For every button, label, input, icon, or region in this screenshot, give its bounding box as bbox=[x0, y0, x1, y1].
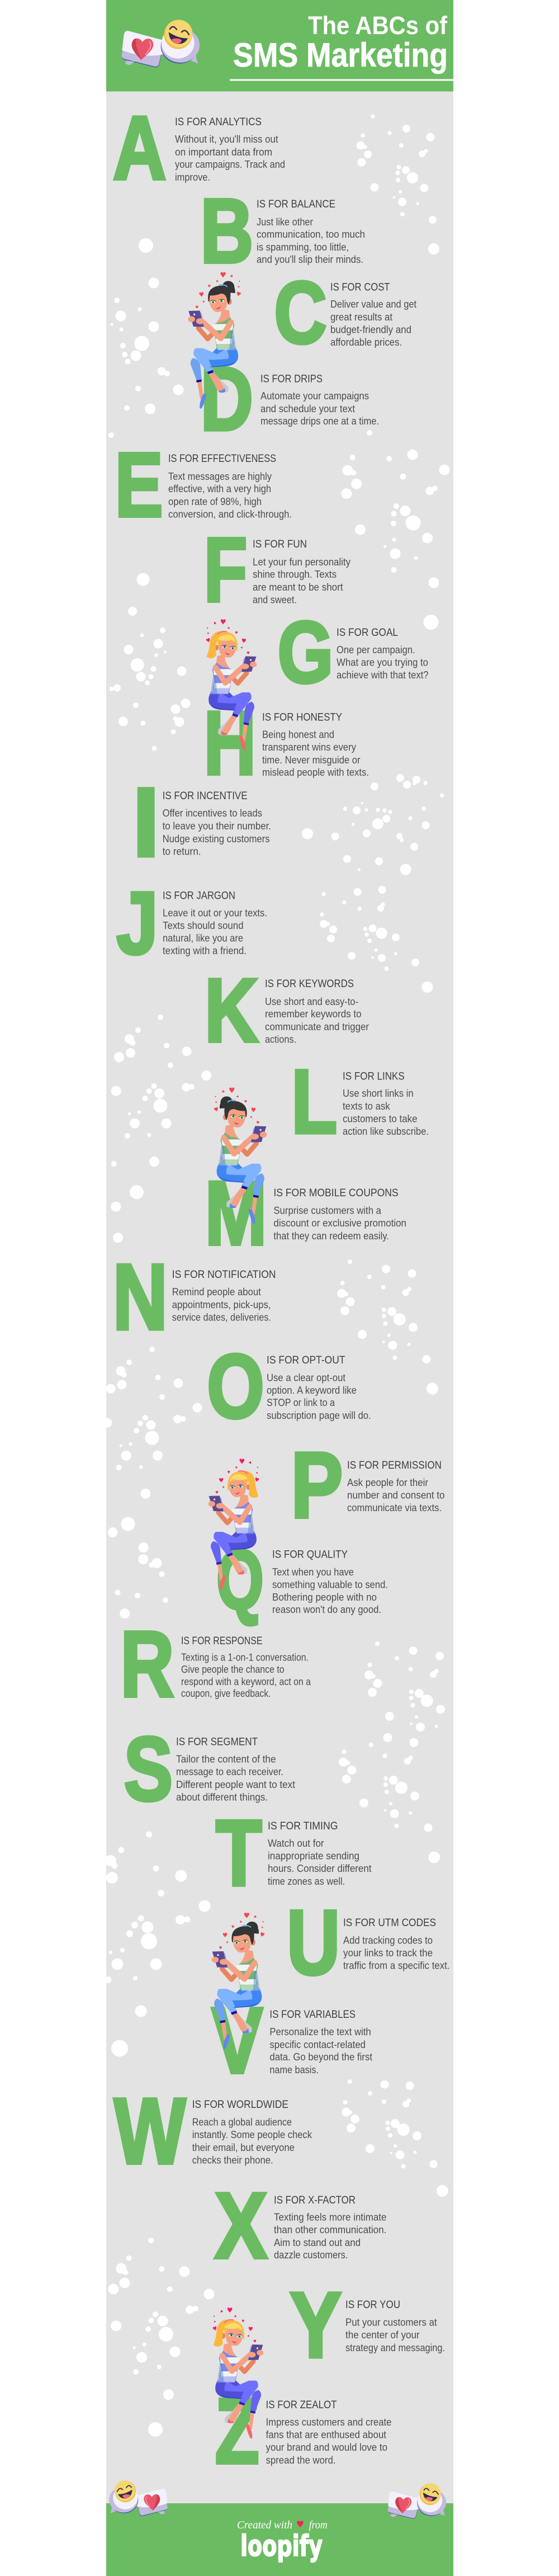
W: worldwide: Reach a global audience bbox=[192, 2117, 292, 2128]
W: worldwide: their email, but everyone bbox=[192, 2142, 295, 2153]
Z: zealot: spread the word. bbox=[266, 2455, 335, 2466]
J: jargon: Leave it out or your texts. bbox=[163, 908, 267, 919]
E: effectiveness: Text messages are highly bbox=[168, 471, 272, 482]
X: x-factor: IS FOR X-FACTOR bbox=[274, 2195, 356, 2206]
W: worldwide: instantly. Some people check bbox=[192, 2129, 312, 2140]
O: opt-out: option. A keyword like bbox=[267, 1385, 357, 1396]
K: keywords: remember keywords to bbox=[265, 1008, 361, 1020]
H: honesty: IS FOR HONESTY bbox=[262, 712, 342, 724]
panel: grey background bbox=[106, 0, 453, 2576]
icon: chat bubbles bbox=[121, 20, 200, 68]
E: effectiveness: E bbox=[115, 433, 163, 536]
A: analytics: A bbox=[113, 98, 167, 199]
J: jargon: IS FOR JARGON bbox=[163, 890, 235, 902]
L: links: action like subscribe. bbox=[343, 1126, 429, 1137]
J: jargon: natural, like you are bbox=[163, 933, 243, 944]
A: analytics: your campaigns. Track and bbox=[175, 159, 285, 170]
I: incentive: to leave you their number. bbox=[163, 820, 271, 832]
F: fun bbox=[204, 518, 350, 621]
V: variables: name basis. bbox=[269, 2064, 319, 2075]
Q: quality bbox=[216, 1532, 388, 1626]
K: keywords: actions. bbox=[265, 1034, 296, 1045]
X: x-factor: X bbox=[215, 2174, 267, 2278]
J: jargon bbox=[116, 874, 267, 973]
character: blonde on Z bbox=[212, 2308, 263, 2438]
D: drips: D bbox=[200, 349, 253, 450]
C: cost: budget-friendly and bbox=[330, 324, 411, 336]
E: effectiveness: effective, with a very high bbox=[168, 483, 271, 494]
Y: you: Put your customers at bbox=[345, 2317, 437, 2328]
Z: zealot: fans that are enthused about bbox=[266, 2429, 386, 2441]
H: honesty: mislead people with texts. bbox=[262, 767, 369, 778]
A: analytics: improve. bbox=[175, 172, 210, 183]
title: The ABCs of bbox=[308, 11, 448, 40]
T: timing: T bbox=[216, 1801, 262, 1905]
R: response: IS FOR RESPONSE bbox=[181, 1635, 262, 1647]
character: blonde on H bbox=[206, 619, 257, 751]
title: SMS Marketing bbox=[233, 36, 448, 74]
Y: you: Y bbox=[290, 2274, 342, 2377]
U: UTM codes: traffic from a specific text. bbox=[343, 1960, 449, 1971]
X: x-factor: Texting feels more intimate bbox=[274, 2212, 386, 2223]
V: variables: Personalize the text with bbox=[269, 2026, 371, 2037]
R: response: Give people the chance to bbox=[181, 1664, 285, 1675]
decorative white dots bbox=[103, 114, 449, 2437]
R: response bbox=[120, 1612, 311, 1716]
K: keywords: IS FOR KEYWORDS bbox=[265, 978, 354, 990]
Q: quality: Bothering people with no bbox=[272, 1592, 377, 1603]
E: effectiveness bbox=[115, 433, 292, 536]
G: goal: G bbox=[278, 604, 333, 701]
A: analytics: on important data from bbox=[175, 147, 272, 158]
P: permission: P bbox=[291, 1433, 343, 1537]
B: balance: communication, too much bbox=[257, 229, 365, 240]
L: links: IS FOR LINKS bbox=[343, 1071, 405, 1083]
Y: you: strategy and messaging. bbox=[345, 2342, 445, 2353]
U: UTM codes: Add tracking codes to bbox=[343, 1935, 433, 1946]
T: timing bbox=[216, 1801, 371, 1905]
N: notification: Remind people about bbox=[172, 1286, 261, 1298]
character: brunette on M bbox=[214, 1088, 267, 1224]
credit line: Created with bbox=[237, 2519, 292, 2531]
E: effectiveness: conversion, and click-through. bbox=[168, 509, 292, 520]
D: drips bbox=[200, 349, 379, 450]
W: worldwide: IS FOR WORLDWIDE bbox=[192, 2099, 288, 2111]
G: goal: One per campaign. bbox=[337, 644, 415, 655]
B: balance: and you'll slip their minds. bbox=[257, 254, 363, 265]
X: x-factor: dazzle customers. bbox=[274, 2249, 348, 2261]
U: UTM codes: your links to track the bbox=[343, 1947, 433, 1959]
M: mobile coupons: M bbox=[205, 1163, 267, 1264]
F: fun: shine through. Texts bbox=[253, 569, 337, 580]
S: segment: IS FOR SEGMENT bbox=[176, 1737, 258, 1748]
N: notification: N bbox=[113, 1245, 168, 1349]
R: response: Texting is a 1-on-1 conversation. bbox=[181, 1652, 309, 1663]
header band bbox=[106, 0, 453, 92]
B: balance bbox=[200, 180, 365, 282]
J: jargon: J bbox=[116, 874, 158, 973]
F: fun: Let your fun personality bbox=[253, 556, 350, 568]
R: response: R bbox=[120, 1612, 174, 1716]
Y: you bbox=[290, 2274, 445, 2377]
title bbox=[233, 11, 448, 74]
X: x-factor: than other communication. bbox=[274, 2224, 386, 2235]
U: UTM codes bbox=[287, 1891, 449, 1994]
Z: zealot: Z bbox=[215, 2380, 259, 2483]
D: drips: message drips one at a time. bbox=[260, 416, 379, 427]
M: mobile coupons: IS FOR MOBILE COUPONS bbox=[273, 1187, 399, 1199]
Y: you: the center of your bbox=[345, 2329, 420, 2341]
M: mobile coupons: that they can redeem easily. bbox=[273, 1230, 389, 1242]
P: permission: IS FOR PERMISSION bbox=[347, 1460, 442, 1471]
O: opt-out bbox=[207, 1336, 371, 1437]
S: segment bbox=[124, 1719, 295, 1820]
Z: zealot bbox=[215, 2380, 391, 2483]
Q: quality: Q bbox=[216, 1532, 264, 1626]
I: incentive bbox=[132, 768, 271, 877]
H: honesty: H bbox=[203, 693, 256, 794]
J: jargon: Texts should sound bbox=[163, 920, 244, 931]
H: honesty: transparent wins every bbox=[262, 742, 356, 753]
C: cost: C bbox=[274, 264, 326, 362]
P: permission: communicate via texts. bbox=[347, 1502, 442, 1513]
logo: Loopify: loopify bbox=[240, 2530, 323, 2563]
F: fun: IS FOR FUN bbox=[253, 539, 307, 550]
Z: zealot: Impress customers and create bbox=[266, 2417, 391, 2428]
N: notification: service dates, deliveries. bbox=[172, 1312, 271, 1323]
D: drips: and schedule your text bbox=[260, 403, 355, 414]
T: timing: Watch out for bbox=[268, 1838, 324, 1849]
S: segment: Tailor the content of the bbox=[176, 1754, 276, 1765]
L: links: texts to ask bbox=[343, 1101, 391, 1112]
U: UTM codes: U bbox=[287, 1891, 340, 1994]
F: fun: F bbox=[204, 518, 247, 621]
W: worldwide: W bbox=[114, 2079, 186, 2183]
O: opt-out: IS FOR OPT-OUT bbox=[267, 1355, 345, 1366]
Q: quality: Text when you have bbox=[272, 1567, 354, 1578]
O: opt-out: STOP or link to a bbox=[267, 1397, 335, 1408]
F: fun: are meant to be short bbox=[253, 582, 343, 593]
N: notification: IS FOR NOTIFICATION bbox=[172, 1269, 276, 1281]
V: variables bbox=[211, 1989, 372, 2093]
X: x-factor bbox=[215, 2174, 386, 2278]
B: balance: is spamming, too little, bbox=[257, 242, 349, 253]
G: goal: What are you trying to bbox=[337, 657, 428, 668]
T: timing: hours. Consider different bbox=[268, 1863, 371, 1874]
Q: quality: something valuable to send. bbox=[272, 1579, 388, 1591]
W: worldwide: checks their phone. bbox=[192, 2154, 273, 2165]
V: variables: V bbox=[211, 1989, 263, 2093]
G: goal bbox=[278, 604, 428, 701]
I: incentive: I bbox=[132, 768, 159, 877]
Q: quality: reason won't do any good. bbox=[272, 1604, 381, 1615]
P: permission: number and consent to bbox=[347, 1490, 445, 1501]
S: segment: S bbox=[124, 1719, 173, 1820]
X: x-factor: Aim to stand out and bbox=[274, 2237, 361, 2248]
Z: zealot: IS FOR ZEALOT bbox=[266, 2399, 337, 2411]
E: effectiveness: open rate of 98%, high bbox=[168, 496, 262, 507]
I: incentive: Offer incentives to leads bbox=[163, 808, 262, 819]
G: goal: IS FOR GOAL bbox=[337, 627, 398, 639]
O: opt-out: subscription page will do. bbox=[267, 1410, 371, 1421]
V: variables: specific contact-related bbox=[269, 2039, 366, 2050]
S: segment: about different things. bbox=[176, 1792, 268, 1803]
L: links: L bbox=[291, 1051, 337, 1153]
title underline bbox=[230, 79, 453, 81]
H: honesty: Being honest and bbox=[262, 729, 334, 740]
K: keywords: Use short and easy-to- bbox=[265, 996, 358, 1007]
footer band bbox=[106, 2480, 453, 2576]
T: timing: time zones as well. bbox=[268, 1876, 345, 1887]
G: goal: achieve with that text? bbox=[337, 669, 428, 681]
A: analytics bbox=[113, 98, 285, 199]
C: cost: IS FOR COST bbox=[330, 281, 390, 293]
T: timing: inappropriate sending bbox=[268, 1851, 359, 1862]
icon: chat bubbles right bbox=[387, 2483, 446, 2520]
R: response: respond with a keyword, act on a bbox=[181, 1676, 311, 1687]
A: analytics: Without it, you'll miss out bbox=[175, 134, 278, 145]
F: fun: and sweet. bbox=[253, 594, 297, 605]
M: mobile coupons: discount or exclusive promotion bbox=[273, 1218, 406, 1229]
W: worldwide bbox=[114, 2079, 312, 2183]
N: notification bbox=[113, 1245, 276, 1349]
A: analytics: IS FOR ANALYTICS bbox=[175, 116, 262, 128]
M: mobile coupons bbox=[205, 1163, 406, 1264]
icon: chat bubbles left bbox=[109, 2480, 168, 2517]
P: permission: Ask people for their bbox=[347, 1477, 428, 1488]
character: blonde on Q bbox=[209, 1459, 259, 1590]
V: variables: IS FOR VARIABLES bbox=[269, 2009, 356, 2021]
J: jargon: texting with a friend. bbox=[163, 945, 247, 956]
C: cost bbox=[274, 264, 416, 362]
K: keywords: K bbox=[205, 960, 258, 1061]
S: segment: Different people want to text bbox=[176, 1779, 295, 1790]
I: incentive: to return. bbox=[163, 846, 201, 857]
S: segment: message to each receiver. bbox=[176, 1766, 283, 1777]
L: links: customers to take bbox=[343, 1113, 417, 1124]
I: incentive: Nudge existing customers bbox=[163, 833, 270, 844]
U: UTM codes: IS FOR UTM CODES bbox=[343, 1917, 436, 1929]
V: variables: data. Go beyond the first bbox=[269, 2051, 372, 2063]
L: links bbox=[291, 1051, 429, 1153]
H: honesty: time. Never misguide or bbox=[262, 754, 360, 766]
D: drips: Automate your campaigns bbox=[260, 390, 369, 402]
C: cost: affordable prices. bbox=[330, 337, 402, 348]
credit line bbox=[237, 2519, 328, 2531]
B: balance: Just like other bbox=[257, 216, 313, 228]
K: keywords bbox=[205, 960, 369, 1061]
O: opt-out: O bbox=[207, 1336, 264, 1437]
T: timing: IS FOR TIMING bbox=[268, 1820, 338, 1832]
P: permission bbox=[291, 1433, 445, 1537]
B: balance: IS FOR BALANCE bbox=[257, 199, 335, 210]
Q: quality: IS FOR QUALITY bbox=[272, 1549, 348, 1560]
character: brunette on D bbox=[188, 272, 241, 409]
O: opt-out: Use a clear opt-out bbox=[267, 1372, 345, 1383]
H: honesty bbox=[203, 693, 369, 794]
L: links: Use short links in bbox=[343, 1088, 414, 1099]
N: notification: appointments, pick-ups, bbox=[172, 1299, 271, 1310]
E: effectiveness: IS FOR EFFECTIVENESS bbox=[168, 453, 276, 465]
M: mobile coupons: Surprise customers with a bbox=[273, 1205, 382, 1216]
D: drips: IS FOR DRIPS bbox=[260, 374, 323, 385]
C: cost: Deliver value and get bbox=[330, 299, 416, 310]
R: response: coupon, give feedback. bbox=[181, 1688, 271, 1699]
I: incentive: IS FOR INCENTIVE bbox=[163, 790, 248, 802]
B: balance: B bbox=[200, 180, 253, 282]
C: cost: great results at bbox=[330, 312, 392, 323]
Z: zealot: your brand and would love to bbox=[266, 2442, 387, 2453]
character: brunette on V bbox=[212, 1913, 265, 2049]
credit line: from bbox=[309, 2519, 328, 2531]
Y: you: IS FOR YOU bbox=[345, 2299, 400, 2311]
K: keywords: communicate and trigger bbox=[265, 1021, 369, 1032]
